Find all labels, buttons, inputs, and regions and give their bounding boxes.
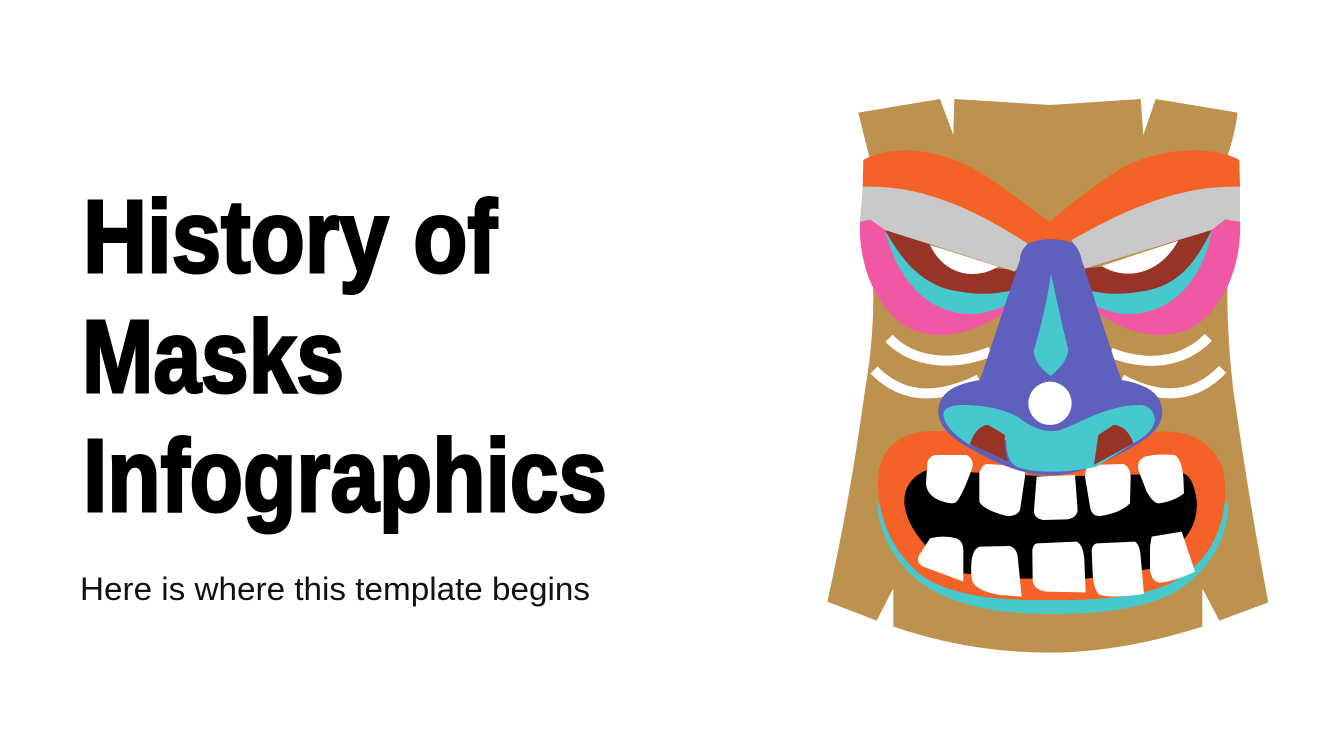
nostrils (970, 425, 1133, 465)
mouth (877, 431, 1228, 614)
lips (878, 431, 1225, 600)
left grey brow (860, 187, 1027, 272)
title (82, 179, 607, 533)
nose tip (943, 405, 1155, 472)
nose dot (1028, 382, 1072, 425)
orange brow (863, 150, 1240, 243)
subtitle: Here is where this template begins (80, 571, 590, 607)
illustration: tiki mask (827, 99, 1268, 653)
title: History of (83, 179, 498, 294)
teeth (918, 454, 1195, 597)
lower lip teal (877, 503, 1228, 614)
nose stripe (1034, 273, 1068, 376)
left eye paint (860, 219, 1017, 335)
title: Masks (82, 299, 344, 414)
mask body (827, 99, 1268, 653)
title: Infographics (83, 418, 607, 533)
nose (938, 239, 1162, 475)
mouth interior (904, 470, 1197, 579)
right eye paint (1085, 219, 1240, 335)
right grey brow (1072, 187, 1240, 268)
cheek lines (874, 337, 1223, 393)
